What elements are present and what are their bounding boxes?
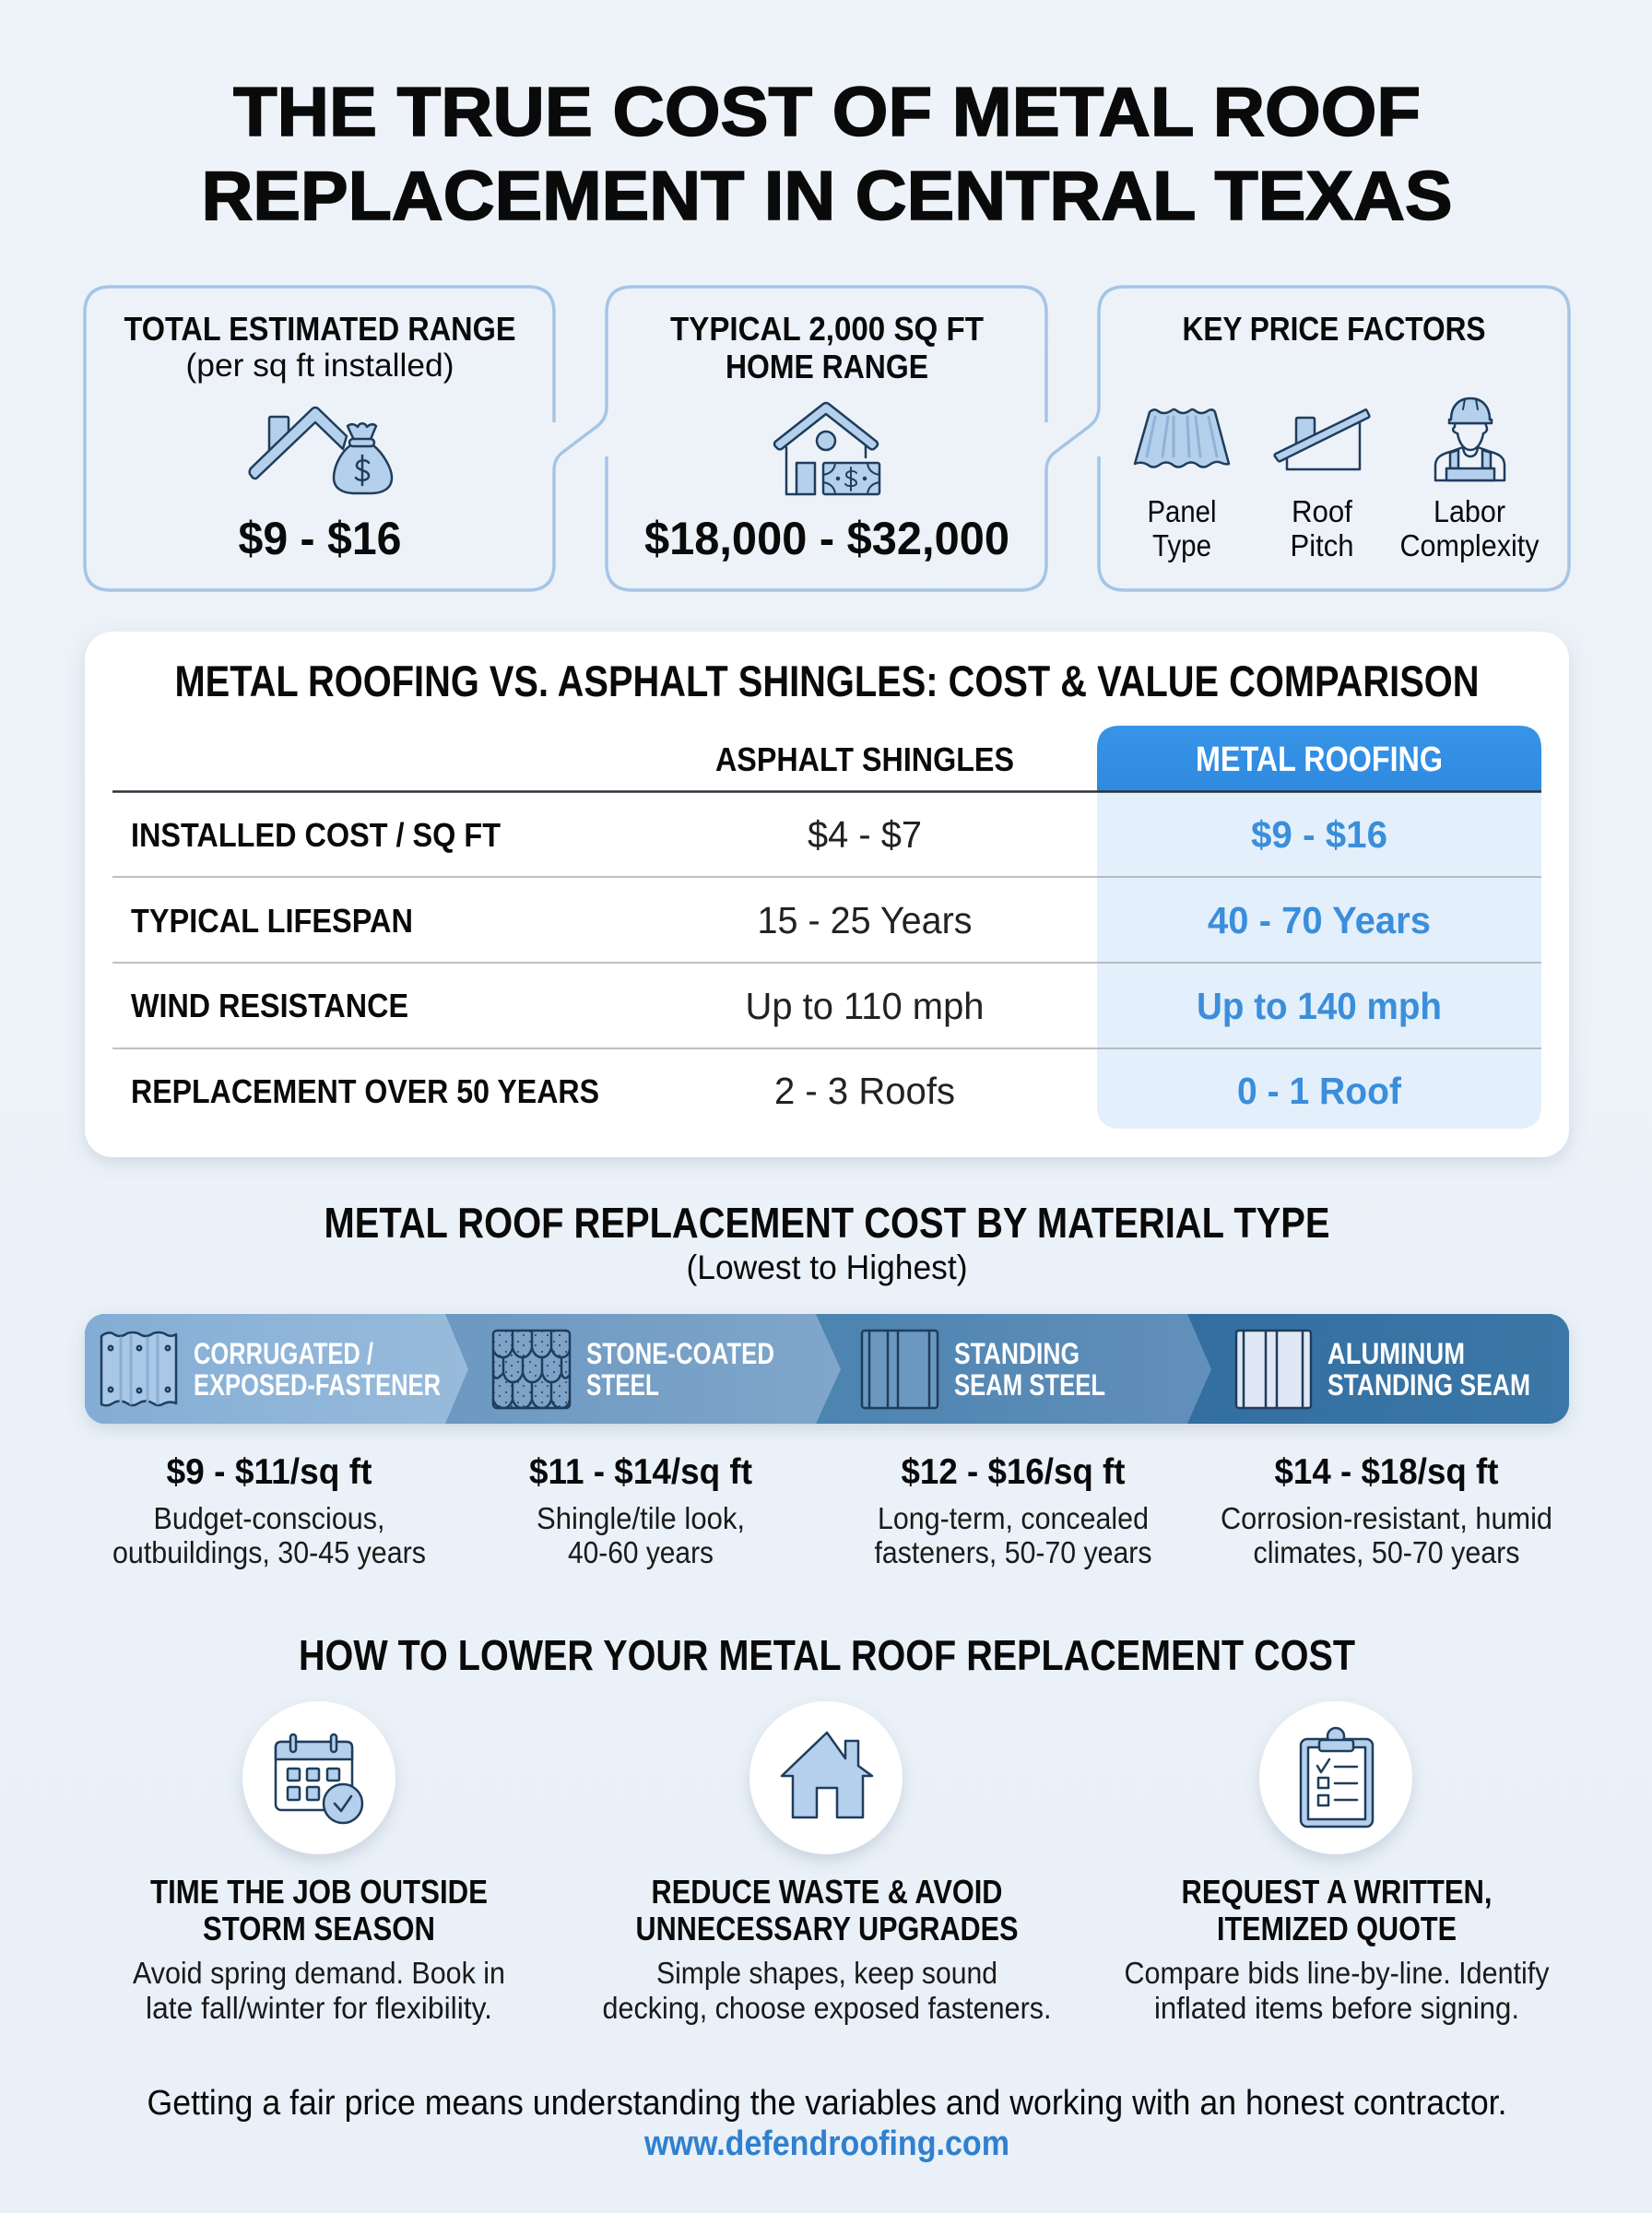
heading: material type: (Lowest to Highest) bbox=[686, 1249, 968, 1286]
title bbox=[201, 73, 1453, 234]
tip: time the job: STORM SEASON bbox=[203, 1910, 435, 1947]
icon: stone-coated tiles bbox=[493, 1331, 570, 1408]
row: installed cost: $9 - $16 bbox=[1251, 813, 1387, 856]
panel: total estimated range: (per sq ft installed) bbox=[186, 348, 454, 384]
tip: written quote: ITEMIZED QUOTE bbox=[1217, 1910, 1457, 1947]
icon: calendar bbox=[276, 1734, 362, 1823]
material column: corrugated bbox=[112, 1452, 426, 1569]
heading: material type bbox=[324, 1199, 1329, 1286]
footer: www.defendroofing.com bbox=[643, 2124, 1009, 2163]
heading: lower your cost: HOW TO LOWER YOUR METAL ROOF REPLACEMENT COST bbox=[299, 1631, 1355, 1679]
metal column header bbox=[1097, 726, 1541, 791]
tip: reduce waste: decking, choose exposed fasteners. bbox=[603, 1991, 1051, 2025]
asphalt column header: ASPHALT SHINGLES bbox=[715, 740, 1014, 778]
panel: key price factors bbox=[1135, 310, 1540, 562]
icon: standing seam steel bbox=[862, 1331, 938, 1408]
row: installed cost bbox=[131, 813, 1387, 856]
panel: total estimated range bbox=[124, 310, 516, 564]
panel: typical home range: TYPICAL 2,000 SQ FT bbox=[670, 310, 984, 348]
material column: aluminum: $14 - $18/sq ft bbox=[1274, 1452, 1499, 1492]
segment: stone-coated: STONE-COATED bbox=[586, 1337, 774, 1370]
tip: written quote: REQUEST A WRITTEN, bbox=[1182, 1873, 1492, 1911]
material column: aluminum: Corrosion-resistant, humid bbox=[1221, 1501, 1552, 1535]
panel: typical home range: $18,000 - $32,000 bbox=[644, 513, 1009, 564]
icon: house with cash bbox=[774, 403, 879, 494]
factor labels: Pitch bbox=[1291, 528, 1353, 562]
material column: corrugated: outbuildings, 30-45 years bbox=[112, 1535, 426, 1569]
title: REPLACEMENT IN CENTRAL TEXAS bbox=[201, 157, 1453, 234]
footer: Getting a fair price means understanding the variables and working with an honest contractor. bbox=[148, 2084, 1506, 2123]
material column: standing seam steel: Long-term, concealed bbox=[878, 1501, 1149, 1535]
material column: corrugated: $9 - $11/sq ft bbox=[166, 1452, 372, 1492]
tip: time the job: Avoid spring demand. Book in bbox=[133, 1956, 505, 1990]
icon: house bbox=[782, 1733, 872, 1817]
icon: labor worker bbox=[1435, 398, 1504, 480]
row: installed cost: $4 - $7 bbox=[808, 813, 922, 856]
segment: standing seam steel: STANDING bbox=[954, 1337, 1080, 1370]
row: wind resistance: Up to 140 mph bbox=[1197, 985, 1442, 1027]
factor labels: Roof bbox=[1292, 494, 1353, 528]
segment: aluminum standing seam bbox=[1236, 1331, 1530, 1408]
panel: total estimated range: $9 - $16 bbox=[238, 513, 402, 564]
row: replacement bbox=[131, 1070, 1401, 1112]
tip: written quote: Compare bids line-by-line. Identify bbox=[1125, 1956, 1550, 1990]
segment: standing seam steel bbox=[862, 1331, 1105, 1408]
tip: time the job: late fall/winter for flexibility. bbox=[146, 1991, 492, 2025]
tip: reduce waste bbox=[603, 1701, 1051, 2025]
title: THE TRUE COST OF METAL ROOF bbox=[233, 73, 1421, 150]
panel: key price factors: KEY PRICE FACTORS bbox=[1182, 310, 1486, 348]
panel: total estimated range: TOTAL ESTIMATED RANGE bbox=[124, 310, 516, 348]
segment: standing seam steel: SEAM STEEL bbox=[954, 1368, 1105, 1402]
material column: standing seam steel bbox=[874, 1452, 1152, 1569]
segment: aluminum standing seam: ALUMINUM bbox=[1328, 1337, 1465, 1370]
row: replacement: REPLACEMENT OVER 50 YEARS bbox=[131, 1072, 599, 1110]
panel: typical home range bbox=[644, 310, 1009, 564]
tip: time the job: TIME THE JOB OUTSIDE bbox=[150, 1873, 488, 1911]
segment: corrugated bbox=[101, 1332, 441, 1405]
row: lifespan: 40 - 70 Years bbox=[1208, 899, 1431, 941]
material column: stone-coated: Shingle/tile look, bbox=[537, 1501, 745, 1535]
factor labels: Panel bbox=[1147, 494, 1217, 528]
material column: stone-coated: 40-60 years bbox=[568, 1535, 714, 1569]
row: installed cost: INSTALLED COST / SQ FT bbox=[131, 816, 501, 854]
segment: aluminum standing seam: STANDING SEAM bbox=[1328, 1368, 1530, 1402]
connected summary card outlines bbox=[85, 287, 1569, 590]
row: replacement: 2 - 3 Roofs bbox=[774, 1070, 955, 1112]
footer bbox=[148, 2084, 1506, 2163]
chevron band: material types bbox=[85, 1314, 1576, 1424]
tip: written quote bbox=[1125, 1701, 1550, 2025]
tip: reduce waste: UNNECESSARY UPGRADES bbox=[636, 1910, 1018, 1947]
material column: stone-coated: $11 - $14/sq ft bbox=[529, 1452, 752, 1492]
row: lifespan bbox=[131, 899, 1431, 941]
metal column header: METAL ROOFING bbox=[1196, 740, 1443, 779]
segment: corrugated: EXPOSED-FASTENER bbox=[194, 1368, 441, 1402]
factor labels bbox=[1147, 494, 1540, 562]
segment: stone-coated: STEEL bbox=[586, 1368, 659, 1402]
material column: standing seam steel: $12 - $16/sq ft bbox=[902, 1452, 1125, 1492]
material column: stone-coated bbox=[529, 1452, 752, 1569]
panel: typical home range: HOME RANGE bbox=[726, 348, 928, 385]
segment: stone-coated bbox=[493, 1331, 774, 1408]
icon: aluminum standing seam bbox=[1236, 1331, 1311, 1408]
factor labels: Labor bbox=[1434, 494, 1505, 528]
segment: corrugated: CORRUGATED / bbox=[194, 1337, 373, 1370]
tip: reduce waste: REDUCE WASTE & AVOID bbox=[651, 1873, 1003, 1911]
metal column highlight bbox=[1097, 791, 1541, 1129]
material column: standing seam steel: fasteners, 50-70 years bbox=[874, 1535, 1152, 1569]
icon: panel type bbox=[1135, 409, 1229, 467]
row: wind resistance: WIND RESISTANCE bbox=[131, 987, 408, 1024]
panel: comparison table bbox=[85, 632, 1569, 1157]
factor labels: Complexity bbox=[1399, 528, 1540, 562]
factor labels: Type bbox=[1152, 528, 1211, 562]
material column: aluminum: climates, 50-70 years bbox=[1254, 1535, 1519, 1569]
icon: roof pitch bbox=[1275, 409, 1369, 469]
tip: time the job bbox=[133, 1701, 505, 2025]
row: lifespan: TYPICAL LIFESPAN bbox=[131, 902, 413, 940]
icon: clipboard checklist bbox=[1301, 1728, 1373, 1827]
icon: roof and money bag bbox=[250, 408, 392, 493]
row: wind resistance: Up to 110 mph bbox=[745, 985, 985, 1027]
tip: written quote: inflated items before signing. bbox=[1154, 1991, 1519, 2025]
tip: reduce waste: Simple shapes, keep sound bbox=[656, 1956, 997, 1990]
heading: material type: METAL ROOF REPLACEMENT COST BY MATERIAL TYPE bbox=[324, 1199, 1329, 1247]
row: lifespan: 15 - 25 Years bbox=[758, 899, 972, 941]
material column: aluminum bbox=[1221, 1452, 1552, 1569]
row: wind resistance bbox=[131, 985, 1442, 1027]
row: replacement: 0 - 1 Roof bbox=[1237, 1070, 1401, 1112]
icon: corrugated panel bbox=[101, 1332, 176, 1405]
material column: corrugated: Budget-conscious, bbox=[153, 1501, 385, 1535]
